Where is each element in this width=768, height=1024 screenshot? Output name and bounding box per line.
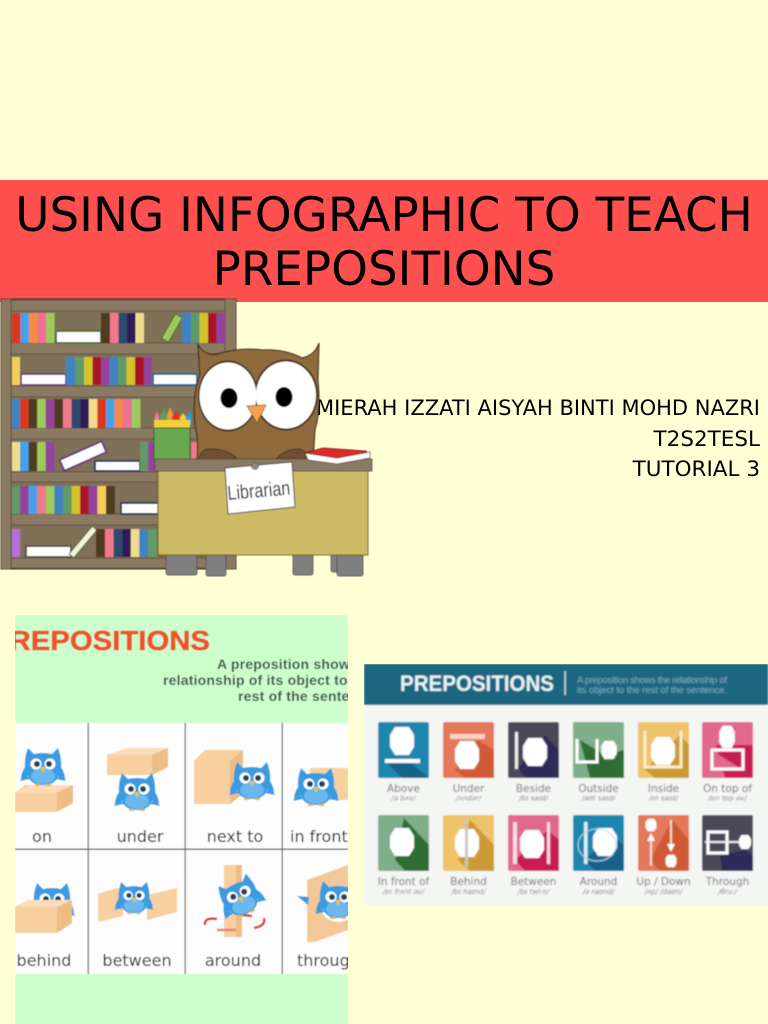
cell: through (296, 864, 348, 970)
icon: through: /θruː/ (717, 888, 737, 896)
illustration: desk (155, 448, 372, 576)
cell: between (98, 882, 177, 970)
description: relationship of its object to the (163, 672, 373, 688)
icon: outside: Outside (578, 783, 619, 795)
cell: around (205, 865, 268, 970)
header bar (364, 664, 768, 705)
librarian sign (225, 462, 295, 514)
icon: behind: /bɪ haɪnd/ (450, 888, 486, 896)
books row 5 (12, 486, 159, 514)
illustration: bookshelf (1, 299, 236, 569)
icon: through (702, 815, 753, 896)
author details: MIERAH IZZATI AISYAH BINTI MOHD NAZRI (316, 396, 760, 420)
books row 3 (12, 399, 140, 428)
shelf boards (1, 299, 236, 569)
cell: next to (194, 750, 275, 846)
header bar: A preposition shows the relationship of (577, 675, 727, 686)
icon: above (378, 722, 429, 802)
icon: between (508, 815, 559, 896)
icon: through: Through (705, 876, 749, 888)
icon: up / down: /ʌp/ /daʊn/ (644, 888, 683, 896)
cell: under (107, 748, 168, 846)
desk legs (166, 553, 363, 576)
icon: around (573, 815, 624, 896)
cell: around: around (205, 951, 261, 970)
cell: behind: behind (17, 951, 71, 970)
icon: under: Under (453, 783, 485, 795)
icon: around: /ə raʊnd/ (582, 888, 615, 896)
owl eyes (198, 360, 318, 432)
cell: between: between (102, 951, 172, 970)
panel: owl prepositions chart (15, 615, 348, 1024)
icon: in front of: In front of (378, 876, 430, 888)
icon: up / down (636, 815, 691, 896)
illustration: crayon cup (154, 407, 192, 461)
icon: outside (573, 722, 624, 802)
author details: T2S2TESL (653, 427, 760, 452)
icon: above: /ə bʌv/ (391, 794, 416, 802)
description: rest of the sentence. (238, 688, 378, 704)
icon: beside: Beside (516, 783, 551, 795)
books row 6 (12, 526, 157, 558)
icon: inside: /ɪn saɪd/ (648, 794, 679, 802)
illustration: owl librarian (194, 343, 319, 462)
desk book (305, 448, 370, 464)
cell: in front (290, 768, 348, 843)
icon: on top of: /ɒn tɒp əv/ (707, 794, 747, 802)
author details: TUTORIAL 3 (632, 457, 760, 482)
icon: up / down: Up / Down (636, 876, 691, 888)
icon: inside: Inside (648, 783, 679, 795)
books row 2 (12, 357, 197, 385)
icon: beside: /bɪ saɪd/ (518, 794, 549, 802)
icon: in front of: /ɪn frʌnt əv/ (382, 888, 425, 896)
icon: around: Around (580, 876, 617, 888)
icon: under: /ʌndər/ (455, 794, 482, 802)
icon: on top of (702, 722, 753, 802)
owl beak (247, 405, 266, 423)
title text (15, 189, 753, 297)
panel: icon prepositions chart (364, 664, 768, 906)
cell: under: under (117, 827, 164, 846)
cell: behind (15, 883, 75, 970)
author details (316, 396, 760, 482)
icon: on top of: On top of (703, 783, 752, 795)
icon: beside (508, 722, 559, 802)
icon: behind (443, 815, 494, 896)
icon: between: Between (511, 876, 556, 888)
books row 4 (12, 441, 199, 471)
librarian sign: Librarian (227, 478, 291, 505)
title text: USING INFOGRAPHIC TO TEACH (15, 189, 753, 243)
cell: through: through (297, 951, 360, 970)
icon: in front of (378, 815, 430, 896)
icon: above: Above (387, 783, 420, 795)
header bar: PREPOSITIONS (400, 671, 554, 696)
icon: between: /bɪ twiːn/ (517, 888, 550, 896)
cell: on: on (32, 827, 52, 846)
icon: inside (638, 722, 689, 802)
description: A preposition shows the (217, 656, 384, 672)
red arrows (205, 915, 264, 930)
cell: on (15, 748, 73, 846)
cell: in front: in front of (290, 827, 369, 846)
cell: next to: next to (207, 827, 263, 846)
icon: behind: Behind (450, 876, 487, 888)
description (163, 658, 348, 702)
title band (0, 180, 768, 302)
icon: under (443, 722, 494, 802)
icon: outside: /aʊt saɪd/ (581, 794, 616, 802)
title text: PREPOSITIONS (213, 243, 555, 297)
books row 1 (12, 313, 225, 343)
header bar: its object to the rest of the sentence. (577, 685, 727, 696)
grid table (15, 723, 348, 974)
owl wings (199, 449, 310, 460)
